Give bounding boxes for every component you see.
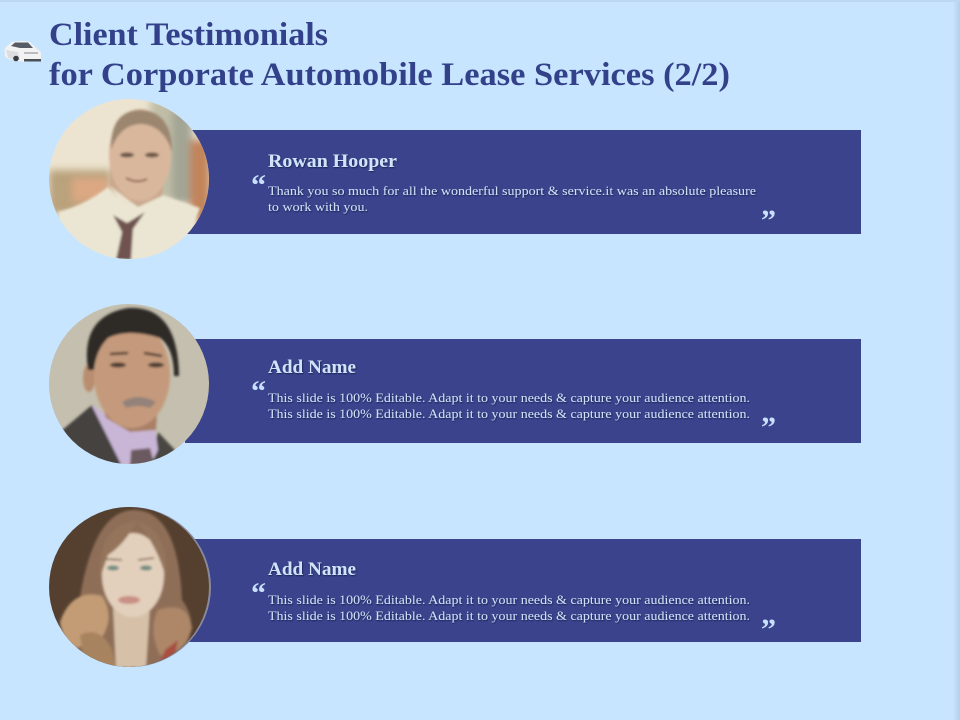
- panel: testimonial Rowan Hooper: [49, 99, 861, 262]
- testimonial text 2: This slide is 100% Editable. Adapt it to your needs & capture your audience attention.: [268, 391, 750, 405]
- banner 3: [185, 539, 861, 642]
- opening quote 2: “: [251, 375, 266, 408]
- testimonial text 1: to work with you.: [268, 200, 368, 214]
- closing quote 2: ”: [761, 411, 776, 444]
- panel: testimonial Add Name 2: [49, 304, 861, 470]
- name 3: Add Name: [268, 559, 356, 580]
- testimonial text 2: This slide is 100% Editable. Adapt it to your needs & capture your audience attention.: [268, 407, 750, 421]
- opening quote 1: “: [251, 169, 266, 202]
- testimonial text 1: [268, 184, 756, 214]
- testimonial text 3: This slide is 100% Editable. Adapt it to your needs & capture your audience attention.: [268, 609, 750, 623]
- panel: testimonial Add Name 3: [49, 507, 861, 668]
- portrait: woman with curly hair: [49, 507, 211, 668]
- testimonial text 3: [268, 593, 750, 623]
- closing quote 1: ”: [761, 204, 776, 237]
- portrait: man in pinstripe suit: [49, 304, 209, 470]
- banner 1: [185, 130, 861, 234]
- testimonial text 2: [268, 391, 750, 421]
- title: for Corporate Automobile Lease Services (2/2): [49, 57, 730, 93]
- icon: white car: [4, 41, 41, 62]
- portrait: bald man in white shirt: [49, 99, 210, 262]
- testimonial text 1: Thank you so much for all the wonderful support & service.it was an absolute pleasure: [268, 184, 756, 198]
- banner 2: [185, 339, 861, 443]
- opening quote 3: “: [251, 577, 266, 610]
- testimonial text 3: This slide is 100% Editable. Adapt it to your needs & capture your audience attention.: [268, 593, 750, 607]
- name 1: Rowan Hooper: [268, 151, 398, 172]
- closing quote 3: ”: [761, 613, 776, 646]
- title: Client Testimonials: [49, 17, 328, 53]
- name 2: Add Name: [268, 357, 356, 378]
- title: [49, 17, 730, 93]
